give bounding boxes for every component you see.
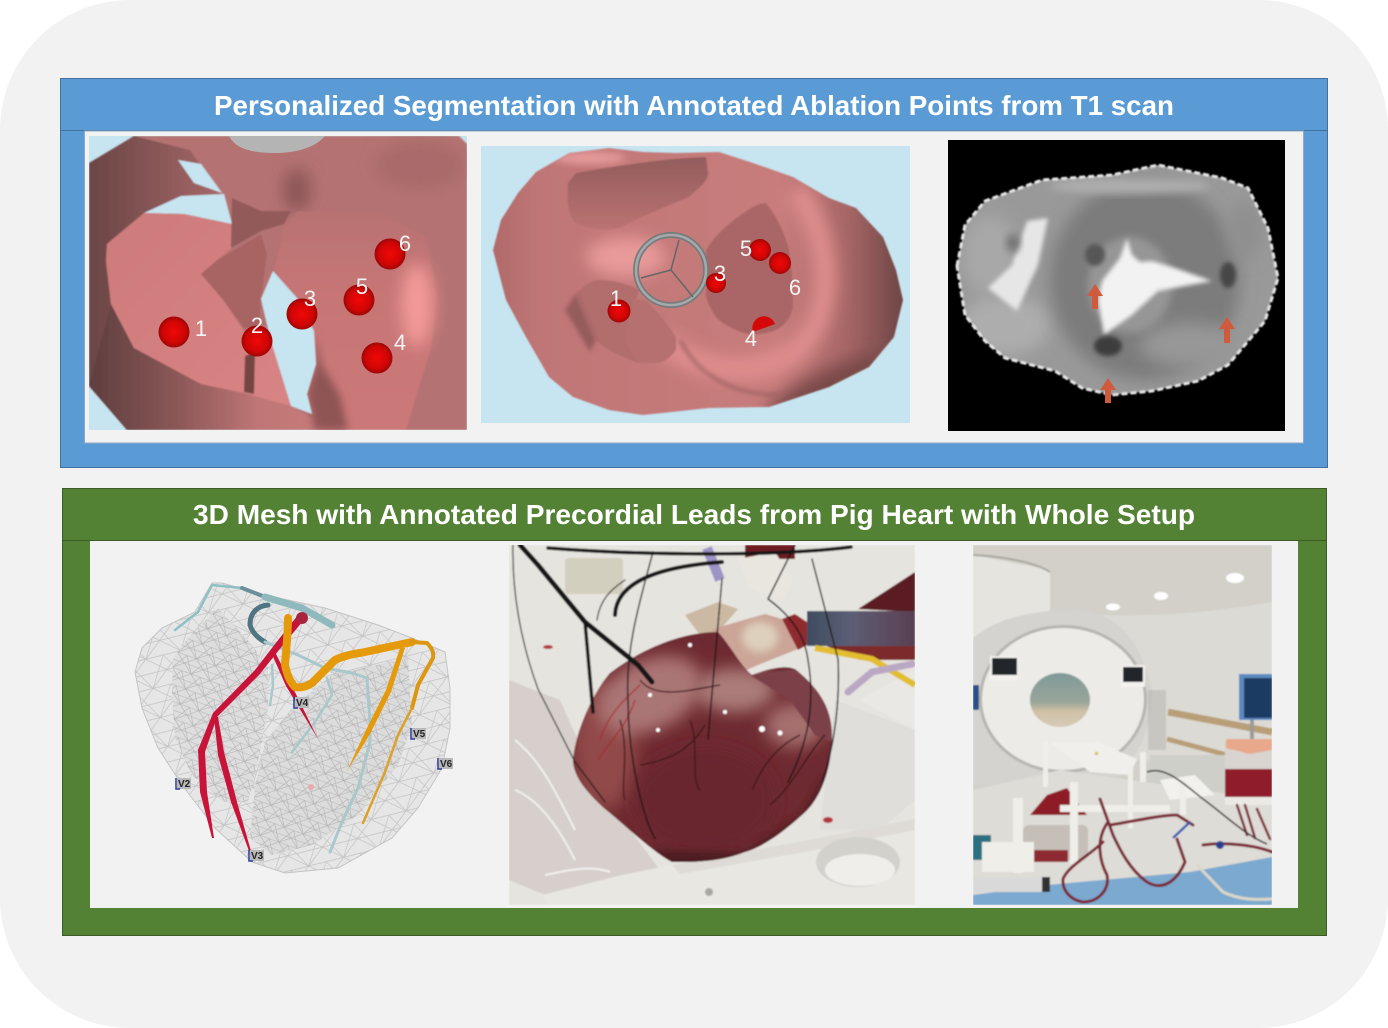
point labels: 1 bbox=[610, 286, 622, 311]
reservoir bbox=[1225, 739, 1272, 805]
wall rails bbox=[1168, 712, 1272, 732]
aorta bbox=[712, 614, 798, 672]
image: 3D mesh with leads bbox=[135, 583, 453, 873]
upper neck bbox=[231, 198, 291, 248]
heading: segmentation: Personalized Segmentation with Annotated Ablation Points from T1 scan bbox=[214, 90, 1174, 121]
scanner shell bbox=[973, 612, 1045, 640]
panel interior bbox=[84, 131, 1304, 443]
black tubing bbox=[513, 545, 851, 839]
point labels: 4 bbox=[745, 326, 757, 351]
point labels bbox=[195, 231, 411, 355]
silver vessel bbox=[229, 136, 325, 153]
point labels: 6 bbox=[789, 275, 801, 300]
bench clutter bbox=[973, 770, 1272, 900]
image: pig heart photo bbox=[509, 545, 915, 905]
ablation points bbox=[158, 238, 406, 374]
image: heart segmentation interior view bbox=[481, 146, 910, 429]
tan paper bbox=[685, 602, 738, 635]
point labels: 5 bbox=[356, 274, 368, 299]
left lobe bbox=[106, 213, 291, 406]
red coronary bbox=[198, 615, 318, 851]
ablation points bbox=[608, 239, 791, 332]
point labels: 4 bbox=[394, 330, 406, 355]
patient table bbox=[1084, 750, 1137, 776]
point labels: 6 bbox=[399, 231, 411, 256]
teal vessels bbox=[175, 585, 370, 852]
panel: segmentation bbox=[60, 78, 1328, 468]
septal flap bbox=[201, 234, 267, 328]
blood stains bbox=[543, 645, 833, 823]
image: T1 scan bbox=[948, 140, 1285, 431]
point labels: 2 bbox=[251, 313, 263, 338]
orange coronary bbox=[285, 618, 433, 823]
image: heart segmentation exterior view bbox=[89, 136, 467, 430]
floor bbox=[1150, 754, 1226, 760]
image: MRI room and setup photo bbox=[973, 545, 1272, 905]
white frames bbox=[982, 742, 1186, 873]
panel: 3D mesh and setup bbox=[62, 488, 1327, 936]
lead labels: V2 bbox=[178, 779, 191, 790]
point labels: 5 bbox=[740, 236, 752, 261]
lead labels: V4 bbox=[296, 698, 309, 709]
purple connectors bbox=[848, 664, 912, 692]
arrows bbox=[1087, 284, 1235, 403]
point labels bbox=[610, 236, 801, 351]
wall monitor bbox=[1239, 674, 1272, 720]
central gap bbox=[261, 271, 316, 414]
heart bbox=[573, 632, 832, 862]
syringe bbox=[973, 878, 1048, 892]
lead labels bbox=[176, 697, 453, 862]
top dark vessels bbox=[745, 545, 795, 559]
organ and container bbox=[1030, 788, 1087, 815]
tray bbox=[545, 868, 660, 895]
heading: mesh: 3D Mesh with Annotated Precordial Leads from Pig Heart with Whole Setup bbox=[193, 499, 1195, 530]
blue drape bbox=[973, 857, 1272, 905]
tubing bbox=[1063, 799, 1272, 902]
bore bbox=[1030, 673, 1090, 727]
valve ring bbox=[636, 235, 706, 305]
scanner screens bbox=[989, 655, 999, 669]
point labels: 3 bbox=[714, 261, 726, 286]
perfusion tube bbox=[807, 611, 915, 646]
lead labels: V6 bbox=[440, 759, 453, 770]
point labels: 1 bbox=[195, 316, 207, 341]
white cap bbox=[744, 553, 780, 560]
yellow clamp bbox=[815, 648, 915, 685]
ceiling lights bbox=[1106, 573, 1244, 610]
point labels: 3 bbox=[304, 286, 316, 311]
lead labels: V3 bbox=[251, 851, 264, 862]
right mass bbox=[274, 211, 437, 430]
back wall bbox=[1104, 602, 1272, 760]
panel interior bbox=[90, 541, 1298, 908]
lead labels: V5 bbox=[413, 729, 426, 740]
upper gaps bbox=[178, 160, 222, 193]
